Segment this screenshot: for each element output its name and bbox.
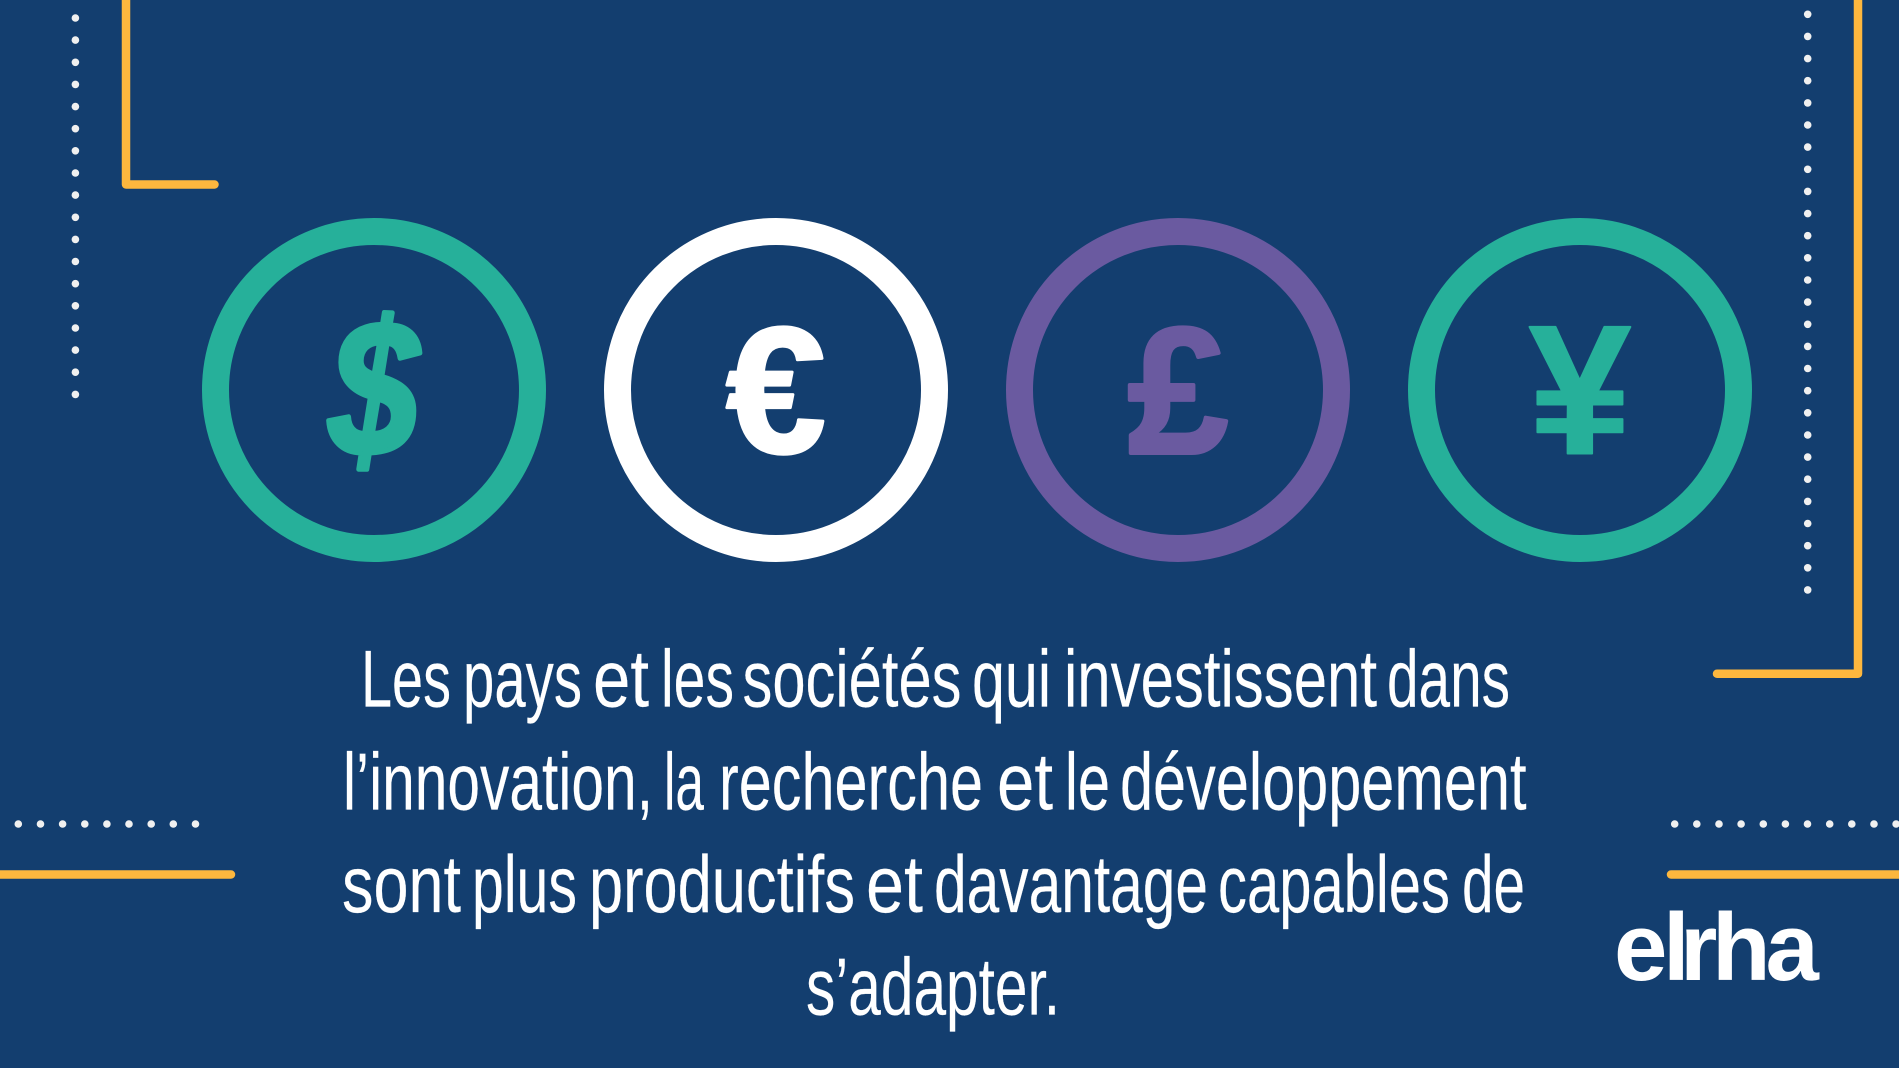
text block: main statement: davantage xyxy=(934,840,1208,930)
text block: main statement: le xyxy=(1065,737,1110,827)
text block: main statement: sont xyxy=(342,840,461,930)
dotted row: bottom right xyxy=(1671,820,1899,828)
text block: main statement: développement xyxy=(1120,737,1526,827)
icon: dollar coin xyxy=(216,232,532,548)
text block: main statement xyxy=(342,635,1526,1032)
yellow line: bottom left xyxy=(0,870,231,879)
text block: main statement: l’innovation, xyxy=(343,737,653,827)
yellow bracket: right xyxy=(1717,0,1858,674)
icon: pound coin xyxy=(1020,232,1336,548)
text block: main statement: pays xyxy=(463,635,582,725)
icon: euro coin: € xyxy=(726,290,826,492)
yellow line: bottom right xyxy=(1671,870,1899,879)
text block: main statement: productifs xyxy=(589,840,855,930)
text block: main statement: qui xyxy=(972,635,1051,725)
dotted row: bottom left xyxy=(0,820,199,828)
logo: elrha: elrha xyxy=(1614,894,1820,1001)
text block: main statement: recherche xyxy=(719,737,983,827)
text block: main statement: investissent xyxy=(1064,635,1377,725)
text block: main statement: les xyxy=(661,635,734,725)
yellow bracket: top left xyxy=(126,0,214,184)
text block: main statement: la xyxy=(664,737,705,827)
text block: main statement: sociétés xyxy=(742,635,962,725)
text block: main statement: Les xyxy=(361,635,451,725)
text block: main statement: plus xyxy=(472,840,577,930)
icon: pound coin: £ xyxy=(1128,291,1228,492)
text block: main statement: s’adapter. xyxy=(806,942,1060,1032)
text block: main statement: et xyxy=(866,840,923,930)
icon: yen coin: ¥ xyxy=(1529,286,1631,492)
icon: dollar coin: $ xyxy=(328,281,421,496)
text block: main statement: de xyxy=(1462,840,1525,930)
dotted column: top right xyxy=(1804,10,1811,594)
text block: main statement: et xyxy=(593,635,649,725)
icon: yen coin xyxy=(1422,232,1738,548)
dotted column: top left xyxy=(72,14,79,398)
icon: euro coin xyxy=(618,232,934,548)
text block: main statement: dans xyxy=(1387,635,1510,725)
text block: main statement: et xyxy=(997,737,1053,827)
text block: main statement: capables xyxy=(1218,840,1450,930)
